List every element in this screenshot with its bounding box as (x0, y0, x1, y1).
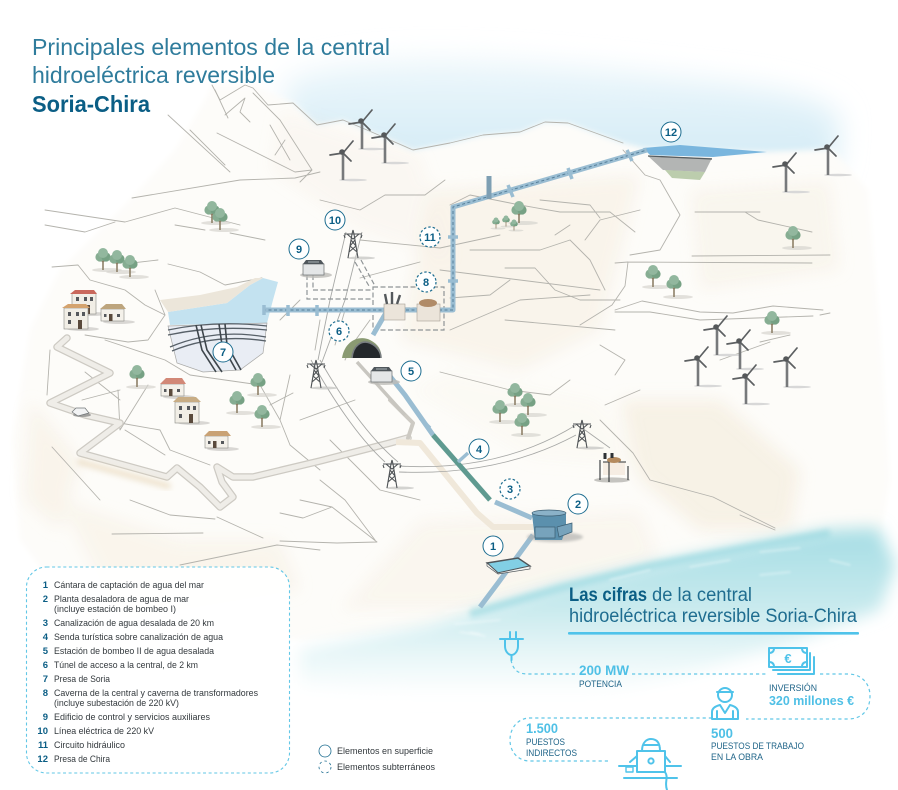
panel: legend of numbered elements (26, 567, 290, 773)
marker 8: 8 (423, 277, 429, 289)
panel: legend of numbered elements: 9 (43, 712, 48, 723)
marker 10 (325, 210, 345, 230)
panel: legend of numbered elements: Estación de bombeo II de agua desalada (54, 646, 215, 657)
marker 4: 4 (476, 444, 483, 456)
marker 7: 7 (220, 347, 226, 359)
key: marker types: Elementos subterráneos (337, 762, 435, 773)
stat: indirect jobs: INDIRECTOS (526, 748, 577, 758)
marker 12: 12 (665, 127, 677, 139)
tunnel entrance (342, 338, 381, 358)
key: marker types (319, 745, 435, 773)
panel: legend of numbered elements: Planta desaladora de agua de mar (54, 594, 189, 605)
car (72, 408, 91, 417)
seawater intake basin (487, 558, 530, 574)
substation (594, 453, 630, 483)
icon: worker (712, 688, 738, 719)
background: sand and shading patches (25, 110, 840, 620)
panel: legend of numbered elements: 10 (37, 726, 48, 737)
shaft (486, 176, 492, 199)
panel: legend of numbered elements: Senda turística sobre canalización de agua (54, 632, 224, 643)
stat: indirect jobs: PUESTOS (526, 737, 565, 747)
panel: legend of numbered elements: Cántara de captación de agua del mar (54, 580, 204, 591)
marker 11: 11 (424, 232, 436, 244)
marker 2 (568, 494, 588, 514)
key: marker types: Elementos en superficie (337, 746, 433, 757)
panel: legend of numbered elements: 11 (38, 740, 49, 751)
title: hidroeléctrica reversible (32, 62, 275, 88)
marker 5: 5 (408, 366, 414, 378)
marker 11 (420, 227, 440, 247)
panel: legend of numbered elements: 2 (43, 594, 48, 605)
stat: jobs on site: EN LA OBRA (711, 752, 763, 762)
panel: legend of numbered elements: Presa de Soria (54, 674, 111, 685)
electrical towers (307, 230, 604, 490)
figures heading: hidroeléctrica reversible Soria-Chira (569, 606, 857, 627)
panel: legend of numbered elements: 3 (43, 618, 48, 629)
marker 3: 3 (507, 484, 513, 496)
trees (92, 201, 812, 437)
stat: investment: INVERSIÓN (769, 683, 817, 693)
marker 1 (483, 536, 503, 556)
title: Soria-Chira (32, 91, 151, 117)
title: Principales elementos de la central (32, 34, 390, 60)
marker 6 (329, 321, 349, 341)
cavern blocks (384, 292, 440, 321)
stat: indirect jobs (526, 721, 577, 758)
marker 6: 6 (336, 326, 342, 338)
marker 3 (500, 479, 520, 499)
marker 9: 9 (296, 244, 302, 256)
building 9: control building (300, 260, 332, 278)
icon: plug (500, 632, 523, 660)
building 5: pumping station II (368, 367, 400, 385)
panel: legend of numbered elements: 6 (43, 660, 48, 671)
wind turbines (330, 110, 852, 405)
panel: legend of numbered elements: Edificio de control y servicios auxiliares (54, 712, 210, 723)
panel: legend of numbered elements: Circuito hidráulico (54, 740, 125, 751)
stat: power: POTENCIA (579, 679, 622, 689)
desalination plant (527, 510, 583, 542)
panel: legend of numbered elements: (incluye subestación de 220 kV) (54, 698, 179, 709)
panel: legend of numbered elements: 12 (37, 754, 48, 765)
stat: jobs on site: PUESTOS DE TRABAJO (711, 741, 804, 751)
title (32, 34, 390, 117)
marker 12 (661, 122, 681, 142)
reservoir: Presa de Chira (643, 145, 767, 180)
marker 1: 1 (490, 541, 496, 553)
stat: power (579, 663, 629, 689)
panel: legend of numbered elements: Túnel de acceso a la central, de 2 km (54, 660, 198, 671)
panel: legend of numbered elements: Caverna de la central y caverna de transformadores (54, 688, 258, 699)
stat: investment (769, 683, 854, 708)
panel: legend of numbered elements: Línea eléctrica de 220 kV (54, 726, 155, 737)
dashed timeline connector (510, 660, 870, 761)
figures heading (568, 585, 859, 635)
panel: legend of numbered elements: 8 (43, 688, 48, 699)
stat: jobs on site: 500 (711, 726, 733, 741)
dashed underground links (307, 260, 444, 330)
hydraulic pipe circuit (263, 150, 647, 607)
marker 10: 10 (329, 215, 341, 227)
background: sky (285, 60, 840, 170)
beige track to the desalination plant (396, 442, 533, 527)
figures heading: Las cifras (569, 585, 647, 606)
reservoir: Presa de Soria (160, 278, 278, 372)
panel: legend of numbered elements: 5 (43, 646, 49, 657)
power lines (311, 232, 610, 472)
stat: investment: 320 millones € (769, 693, 854, 708)
marker 5 (401, 361, 421, 381)
icon: euro banknotes: € (784, 651, 792, 666)
panel: legend of numbered elements: (incluye estación de bombeo I) (54, 604, 176, 615)
road beside the tunnel (357, 362, 405, 415)
marker 8 (416, 272, 436, 292)
stat: power: 200 MW (579, 663, 629, 678)
stat: indirect jobs: 1.500 (526, 721, 558, 736)
panel: legend of numbered elements: Presa de Chira (54, 754, 111, 765)
background: land mass (12, 85, 890, 640)
panel: legend of numbered elements: 1 (43, 580, 49, 591)
panel: legend of numbered elements: 4 (43, 632, 49, 643)
icon: euro banknotes (769, 648, 814, 674)
panel: legend of numbered elements: Canalización de agua desalada de 20 km (54, 618, 214, 629)
marker 9 (289, 239, 309, 259)
marker 2: 2 (575, 499, 581, 511)
stat: jobs on site (711, 726, 804, 762)
marker 4 (469, 439, 489, 459)
winding road (50, 338, 413, 507)
panel: legend of numbered elements: 7 (43, 674, 48, 685)
figures heading: de la central (652, 585, 752, 606)
icon: person with laptop (619, 739, 681, 790)
sea (300, 528, 896, 695)
marker 7 (213, 342, 233, 362)
village houses (62, 290, 239, 451)
sketched terrain lines (45, 85, 830, 565)
